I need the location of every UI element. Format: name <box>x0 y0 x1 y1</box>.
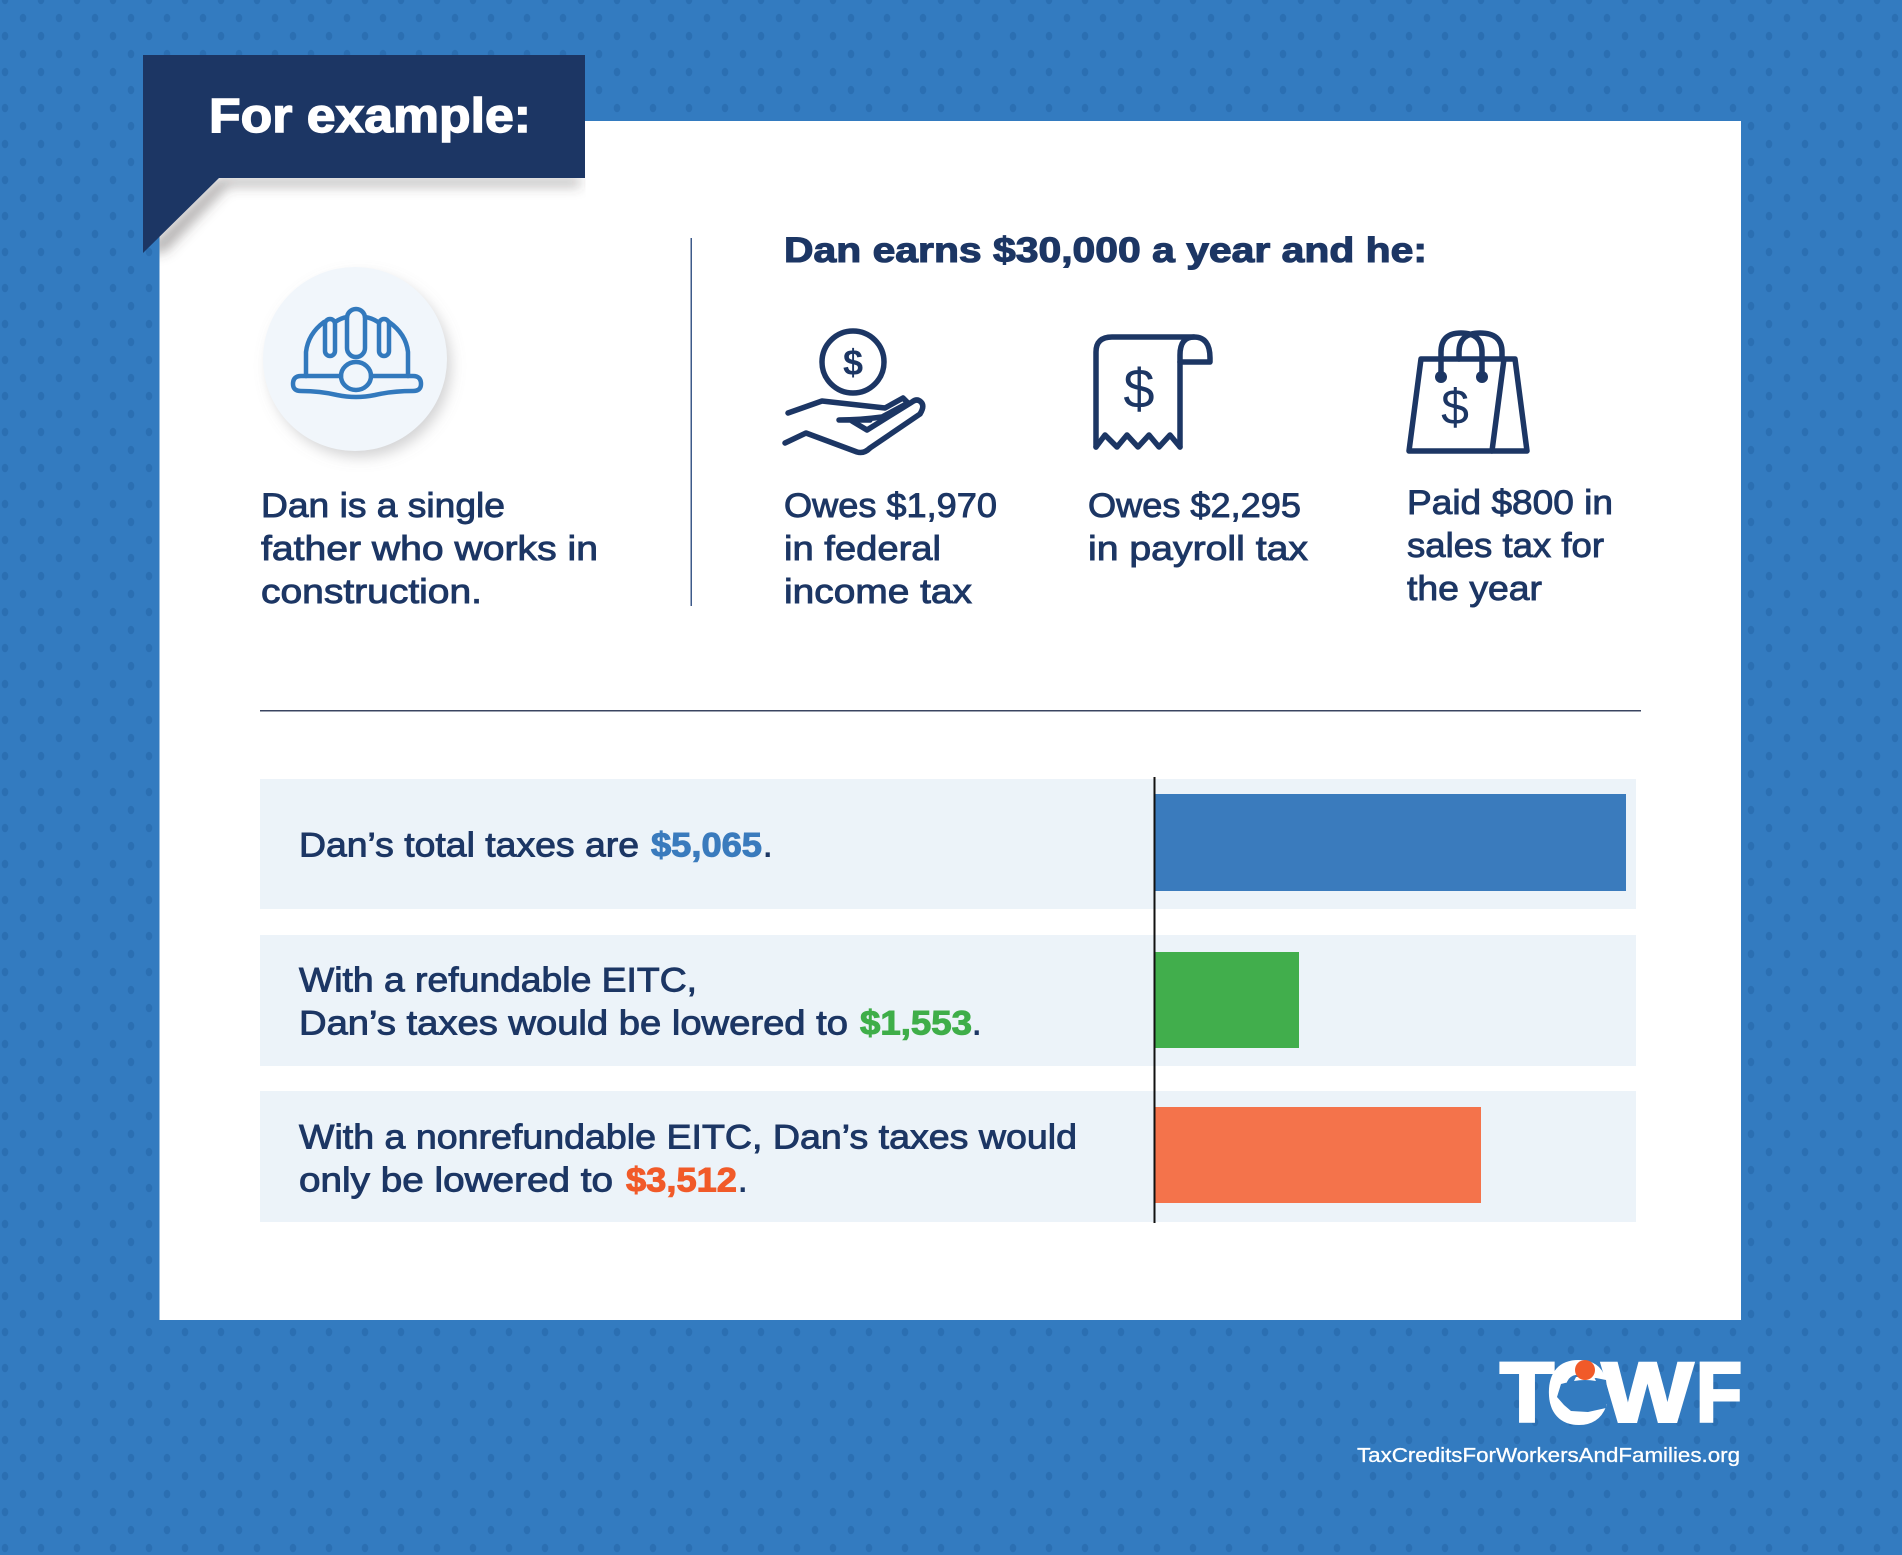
icon: hand with coin: $ <box>843 342 863 383</box>
text: Dan description: construction. <box>261 573 482 611</box>
icon: receipt with dollar <box>1096 337 1210 447</box>
row text: refundable EITC: With a refundable EITC, <box>299 962 697 1000</box>
text: sales tax: Paid $800 in <box>1407 484 1613 522</box>
icon: receipt with dollar: $ <box>1123 357 1155 420</box>
text: Dan description <box>261 487 598 611</box>
row text: total taxes: . <box>763 826 772 864</box>
row text: nonrefundable EITC: $3,512 <box>626 1162 737 1200</box>
row text: nonrefundable EITC: . <box>738 1162 747 1200</box>
banner: for example <box>143 55 585 253</box>
logo: TCWF <box>1500 1346 1742 1440</box>
heading: Dan earns: Dan earns $30,000 a year and he: <box>784 231 1427 270</box>
row text: total taxes <box>299 826 772 864</box>
row: refundable EITC <box>260 935 1636 1066</box>
logo: TCWF: W <box>1602 1346 1694 1440</box>
bar: nonrefundable EITC <box>1155 1107 1481 1203</box>
text: payroll tax: Owes $2,295 <box>1088 487 1301 525</box>
bar: refundable EITC <box>1155 952 1299 1048</box>
text: federal income tax: income tax <box>784 573 972 611</box>
icon: shopping bag with dollar <box>1409 333 1527 451</box>
row text: refundable EITC: . <box>972 1004 981 1042</box>
text: payroll tax <box>1088 487 1308 568</box>
text: federal income tax: in federal <box>784 530 941 568</box>
text: sales tax: the year <box>1407 570 1542 608</box>
bar: total taxes <box>1155 794 1626 891</box>
row text: nonrefundable EITC: only be lowered to <box>299 1162 613 1200</box>
row: total taxes <box>260 779 1636 909</box>
text: sales tax: sales tax for <box>1407 527 1604 565</box>
row text: refundable EITC: $1,553 <box>860 1004 972 1042</box>
icon: hard hat in circle <box>263 267 451 457</box>
text: Dan description: Dan is a single <box>261 487 505 525</box>
row text: refundable EITC <box>299 962 981 1042</box>
row text: total taxes: Dan’s total taxes are <box>299 826 639 864</box>
row: nonrefundable EITC <box>260 1091 1636 1222</box>
logo: TCWF: F <box>1696 1346 1742 1440</box>
row text: total taxes: $5,065 <box>651 826 762 864</box>
banner title: For example: <box>209 90 531 143</box>
logo: TCWF: T <box>1500 1346 1554 1440</box>
row text: nonrefundable EITC: With a nonrefundable EITC, Dan’s taxes would <box>299 1118 1077 1156</box>
row text: refundable EITC: Dan’s taxes would be lowered to <box>299 1004 848 1042</box>
text: Dan description: father who works in <box>261 530 598 568</box>
icon: shopping bag with dollar: $ <box>1441 379 1469 435</box>
panel: white card <box>160 121 1741 1320</box>
icon: hand with coin <box>785 331 923 452</box>
banner shadow <box>143 178 580 253</box>
text: federal income tax <box>784 487 997 611</box>
logo url: TaxCreditsForWorkersAndFamilies.org <box>1357 1445 1740 1467</box>
row text: nonrefundable EITC <box>299 1118 1077 1200</box>
text: federal income tax: Owes $1,970 <box>784 487 997 525</box>
text: sales tax <box>1407 484 1613 608</box>
logo: TCWF: C <box>1548 1346 1606 1440</box>
text: payroll tax: in payroll tax <box>1088 530 1308 568</box>
